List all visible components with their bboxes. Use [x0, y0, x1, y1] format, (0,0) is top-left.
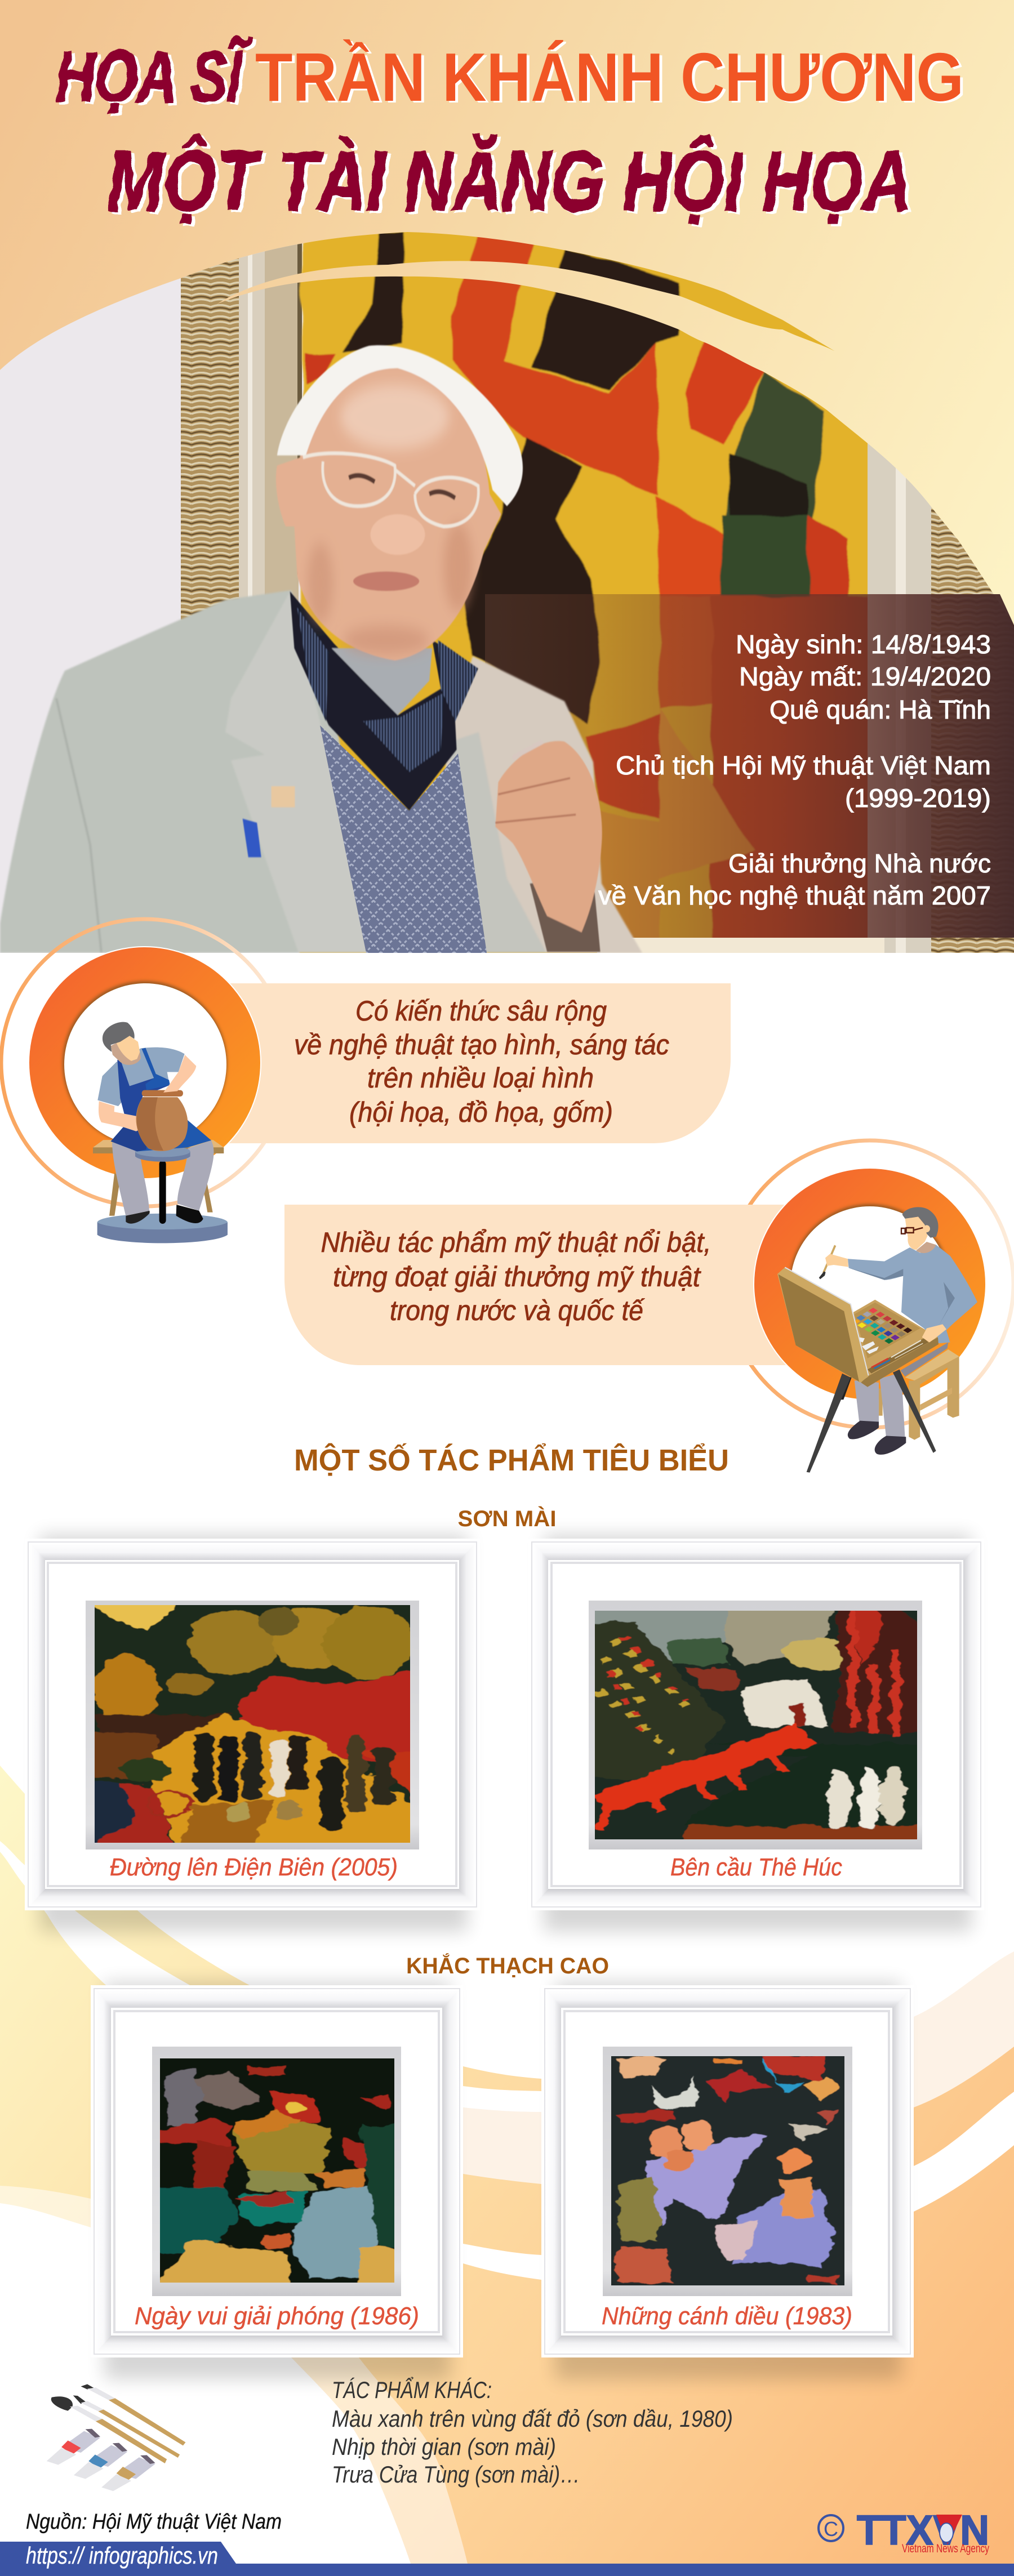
- man: lapel pin: [272, 786, 295, 807]
- man: jacket: [0, 590, 642, 953]
- callout 2 text: trong nước và quốc tế: [390, 1295, 645, 1326]
- painting: Đường lên Điện Biên: [95, 1605, 410, 1843]
- potter orange ring: [28, 946, 261, 1179]
- callout 1: potter: [1, 919, 731, 1243]
- portrait photo: [0, 225, 1014, 957]
- caption: Ngày vui giải phóng: Ngày vui giải phóng (1986): [135, 2302, 419, 2330]
- easel lid: [777, 1267, 869, 1383]
- trousers and shoes: [848, 1342, 948, 1455]
- icon: brushes and paint tubes: [47, 2384, 185, 2491]
- sweater: [848, 1245, 977, 1343]
- man: scarf: [290, 591, 478, 810]
- head: [901, 1207, 939, 1253]
- date of death: Ngày mất: 19/4/2020: [739, 662, 991, 691]
- home town: Quê quán: Hà Tĩnh: [770, 695, 991, 724]
- award line 1: Giải thưởng Nhà nước: [728, 849, 991, 878]
- potter outer thin ring: [1, 919, 288, 1206]
- agency wordmark: TTXVN: [857, 2507, 989, 2553]
- chairman role: Chủ tịch Hội Mỹ thuật Việt Nam: [616, 751, 991, 780]
- caption: Bên cầu Thê Húc: Bên cầu Thê Húc: [670, 1853, 842, 1881]
- photo: lower light strip: [597, 938, 884, 955]
- other work 1: Màu xanh trên vùng đất đỏ (sơn dầu, 1980): [332, 2405, 733, 2432]
- frame: Ngày vui giải phóng: [91, 1982, 463, 2379]
- logo: TTXVN: [819, 2507, 989, 2555]
- man: sweater: [320, 725, 487, 953]
- man: hand holding pencil: [495, 741, 602, 952]
- cream swoosh over portrait: [217, 261, 1014, 625]
- footer url: https:// infographics.vn: [26, 2542, 218, 2569]
- photo: abstract lacquer painting: [301, 225, 870, 957]
- copyright mark: [819, 2515, 843, 2541]
- stool: [879, 1349, 959, 1440]
- painter outer thin ring: [726, 1140, 1013, 1428]
- swoosh: cream band: [225, 1951, 1014, 2185]
- sub heading: lacquer: SƠN MÀI: [457, 1506, 557, 1531]
- award line 2: về Văn học nghệ thuật năm 2007: [598, 881, 991, 910]
- other works heading: TÁC PHẨM KHÁC:: [332, 2376, 492, 2403]
- callout 1 text: về nghệ thuật tạo hình, sáng tác: [294, 1029, 669, 1060]
- swoosh: white lower-left: [0, 2203, 411, 2576]
- photo: wall: [0, 225, 304, 957]
- callout 1 text: (hội họa, đồ họa, gốm): [349, 1097, 613, 1128]
- man: face shading: [307, 385, 473, 654]
- callout 1 text: Có kiến thức sâu rộng: [355, 995, 607, 1027]
- callout 2 banner: [284, 1205, 845, 1365]
- man: face: [276, 368, 501, 661]
- paint tube red: [47, 2429, 100, 2465]
- man: glasses: [303, 453, 478, 527]
- man: blue pen: [243, 819, 261, 857]
- background: lower swooshes: [0, 1766, 1014, 2576]
- brush 3: [51, 2396, 167, 2463]
- brush 2: [73, 2395, 180, 2458]
- swoosh: light band: [0, 2186, 468, 2576]
- man: white hair: [277, 345, 523, 506]
- tripod: [807, 1370, 936, 1473]
- painting: Những cánh diều: [611, 2056, 844, 2285]
- frame: Đường lên Điện Biên: [25, 1535, 480, 1932]
- painting arm hand and brush: [820, 1245, 848, 1278]
- swoosh: white band left: [0, 1841, 620, 2112]
- callout 2: painter: [284, 1140, 1013, 1473]
- other works list: [332, 2376, 733, 2488]
- photo: portrait of the painter: [0, 345, 642, 953]
- other work 2: Nhịp thời gian (sơn mài): [332, 2434, 556, 2460]
- caption: Đường lên Điện Biên: Đường lên Điện Biên (2005): [110, 1853, 398, 1881]
- other work 3: Trưa Cửa Tùng (sơn mài)…: [332, 2461, 580, 2488]
- footer url tab: [0, 2542, 236, 2576]
- callout 2 text: từng đoạt giải thưởng mỹ thuật: [333, 1261, 701, 1293]
- photo: right picture frame: [868, 394, 1014, 957]
- background: header gradient: [0, 0, 1014, 953]
- supporting hand: [922, 1324, 946, 1342]
- frame: Những cánh diều: [541, 1982, 914, 2379]
- frame: Bên cầu Thê Húc: [528, 1535, 984, 1932]
- paint box: [853, 1300, 939, 1387]
- painter orange ring: [753, 1167, 986, 1401]
- copyright mark: C: [824, 2517, 838, 2541]
- man: head and collar, hand: [243, 345, 602, 952]
- swoosh: main gradient: [0, 1766, 1014, 2576]
- footer blue strip: [0, 2564, 1014, 2576]
- painting: Bên cầu Thê Húc: [595, 1611, 917, 1839]
- paint tube ochre: [101, 2455, 155, 2491]
- info panel backdrop: [485, 594, 1014, 938]
- icon: painter with easel: [777, 1207, 977, 1473]
- sub heading: plaster engraving: KHẮC THẠCH CAO: [406, 1953, 609, 1978]
- info panel text: [598, 630, 991, 910]
- callout 1 text: [294, 995, 669, 1128]
- painting: Ngày vui giải phóng: [160, 2058, 394, 2283]
- footer bar: [0, 2542, 1014, 2576]
- callout 1 text: trên nhiều loại hình: [367, 1062, 594, 1094]
- globe emblem: [936, 2515, 962, 2544]
- caption: Những cánh diều: Những cánh diều (1983): [602, 2302, 852, 2330]
- callout 2 text: Nhiều tác phẩm mỹ thuật nổi bật,: [321, 1227, 711, 1258]
- chairman years: (1999-2019): [845, 783, 991, 813]
- paint tube blue: [74, 2443, 127, 2479]
- source line: Nguồn: Hội Mỹ thuật Việt Nam: [26, 2510, 282, 2534]
- callout 2 text: [321, 1227, 711, 1326]
- title: [55, 37, 964, 228]
- title line 1: Họa sĩ: HỌA SĨ: [55, 37, 251, 117]
- man: eyes, nose, mouth: [349, 475, 455, 591]
- date of birth: Ngày sinh: 14/8/1943: [736, 630, 991, 659]
- man: turtleneck: [332, 648, 432, 715]
- icon: potter at wheel: [93, 1022, 228, 1243]
- swoosh: white band right: [394, 2092, 1014, 2280]
- photo: left picture frame: [181, 237, 302, 631]
- callout 1 banner: [169, 983, 731, 1143]
- brush 1: [81, 2384, 185, 2445]
- section heading: MỘT SỐ TÁC PHẨM TIÊU BIỂU: [294, 1443, 729, 1477]
